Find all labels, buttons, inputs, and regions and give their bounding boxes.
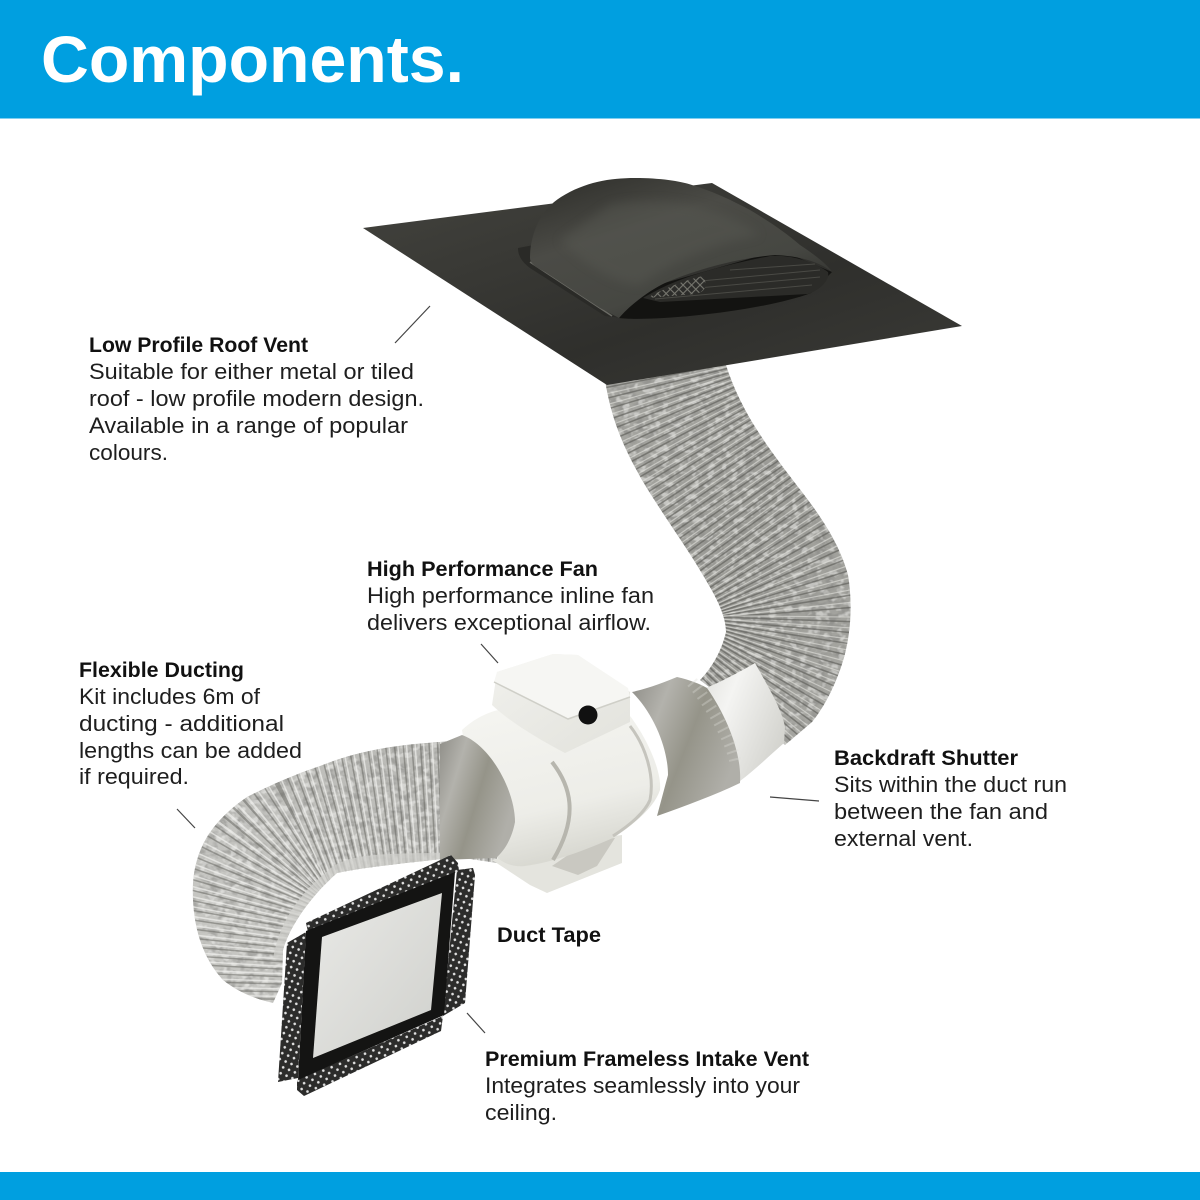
premium frameless intake vent: [278, 855, 475, 1096]
text: low profile roof vent: Available in a range of popular: [89, 413, 408, 438]
text: high performance fan: [367, 557, 654, 635]
inline fan: [462, 654, 660, 893]
leader line: roof vent: [395, 306, 430, 343]
text: high performance fan: High performance inline fan: [367, 583, 654, 608]
text: low profile roof vent: [89, 333, 424, 465]
text: high performance fan: delivers exceptional airflow.: [367, 610, 651, 635]
text: low profile roof vent: Suitable for either metal or tiled: [89, 359, 414, 384]
text: flexible ducting: Flexible Ducting: [79, 658, 244, 682]
vent: right perforated flange: [443, 868, 475, 1016]
leader line: fan: [481, 644, 498, 663]
text: premium frameless intake vent: ceiling.: [485, 1100, 557, 1125]
text: premium frameless intake vent: Premium Frameless Intake Vent: [485, 1047, 809, 1071]
duct: smooth inner bend: [286, 866, 455, 960]
text: low profile roof vent: Low Profile Roof Vent: [89, 333, 308, 357]
text: backdraft shutter: [834, 746, 1067, 851]
text: premium frameless intake vent: [485, 1047, 809, 1125]
title: Components.: [41, 22, 464, 96]
leader line: ducting: [177, 809, 195, 828]
text: high performance fan: High Performance Fan: [367, 557, 598, 581]
text: premium frameless intake vent: Integrates seamlessly into your: [485, 1073, 800, 1098]
fan: clamp ring left: [552, 762, 570, 860]
vent: left perforated flange: [278, 932, 306, 1082]
flexible duct: lower elbow: [192, 742, 497, 1003]
flexible duct: upper run: [606, 365, 851, 745]
footer banner: [0, 1172, 1200, 1200]
text: backdraft shutter: external vent.: [834, 826, 973, 851]
vent: top perforated flange: [306, 855, 459, 932]
dome: soft highlight: [560, 201, 760, 285]
text: flexible ducting: lengths can be added: [79, 738, 302, 763]
silver foil tape: left of fan: [440, 735, 515, 860]
fan: mounting stand: [492, 835, 622, 893]
text: backdraft shutter: Sits within the duct run: [834, 772, 1067, 797]
roof vent flashing plate: [363, 183, 962, 385]
leader line: backdraft shutter: [770, 797, 819, 801]
vent: white panel: [313, 893, 442, 1058]
fan: clamp ring right: [613, 726, 651, 836]
vent: bottom perforated flange: [297, 1016, 443, 1096]
text: flexible ducting: if required.: [79, 764, 189, 789]
dome: mesh: [643, 256, 828, 302]
silver foil tape: right of fan: [632, 677, 740, 816]
dome: shell: [530, 178, 832, 318]
white duct tape: backdraft shutter section: [706, 663, 785, 781]
text: duct tape: Duct Tape: [497, 923, 601, 947]
roof vent dome: [518, 178, 832, 319]
header banner: [0, 0, 1200, 118]
dome: opening shadow: [619, 250, 832, 319]
fan: cable gland: [578, 706, 598, 724]
text: low profile roof vent: roof - low profile modern design.: [89, 386, 424, 411]
text: flexible ducting: Kit includes 6m of: [79, 684, 261, 709]
text: backdraft shutter: Backdraft Shutter: [834, 746, 1019, 770]
fan: main body: [462, 708, 660, 866]
text: low profile roof vent: colours.: [89, 440, 168, 465]
text: flexible ducting: ducting - additional: [79, 711, 284, 736]
dome: flange: [518, 240, 640, 318]
fan: box lid: [494, 654, 630, 719]
text: flexible ducting: [79, 658, 302, 789]
text: backdraft shutter: between the fan and: [834, 799, 1048, 824]
fan: junction box: [492, 654, 630, 753]
vent: black frame: [298, 872, 455, 1080]
leader line: intake vent: [467, 1013, 485, 1033]
